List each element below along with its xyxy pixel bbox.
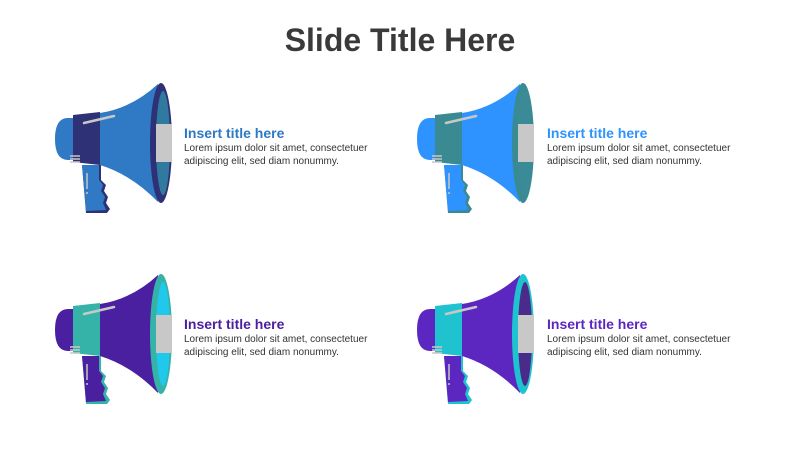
icon: megaphone 3 [55, 274, 172, 404]
icon: megaphone 4 [417, 274, 534, 404]
text block 4: Insert title here [547, 316, 647, 332]
text block 2 [547, 125, 730, 166]
text block 4 [547, 316, 730, 358]
icon: megaphone 1 [55, 83, 172, 213]
text block 4: Lorem ipsum dolor sit amet, consectetuer adipiscing elit, sed diam nonummy. [547, 334, 730, 358]
text block 3: Lorem ipsum dolor sit amet, consectetuer adipiscing elit, sed diam nonummy. [184, 334, 367, 358]
text block 1 [184, 125, 368, 166]
text block 3 [184, 316, 368, 358]
text block 2: Lorem ipsum dolor sit amet, consectetuer adipiscing elit, sed diam nonummy. [547, 143, 730, 166]
text block 1: Insert title here [184, 125, 284, 141]
title: Slide Title Here [285, 22, 515, 58]
text block 3: Insert title here [184, 316, 284, 332]
text block 2: Insert title here [547, 125, 647, 141]
icon: megaphone 2 [417, 83, 534, 213]
text block 1: Lorem ipsum dolor sit amet, consectetuer adipiscing elit, sed diam nonummy. [184, 143, 367, 166]
